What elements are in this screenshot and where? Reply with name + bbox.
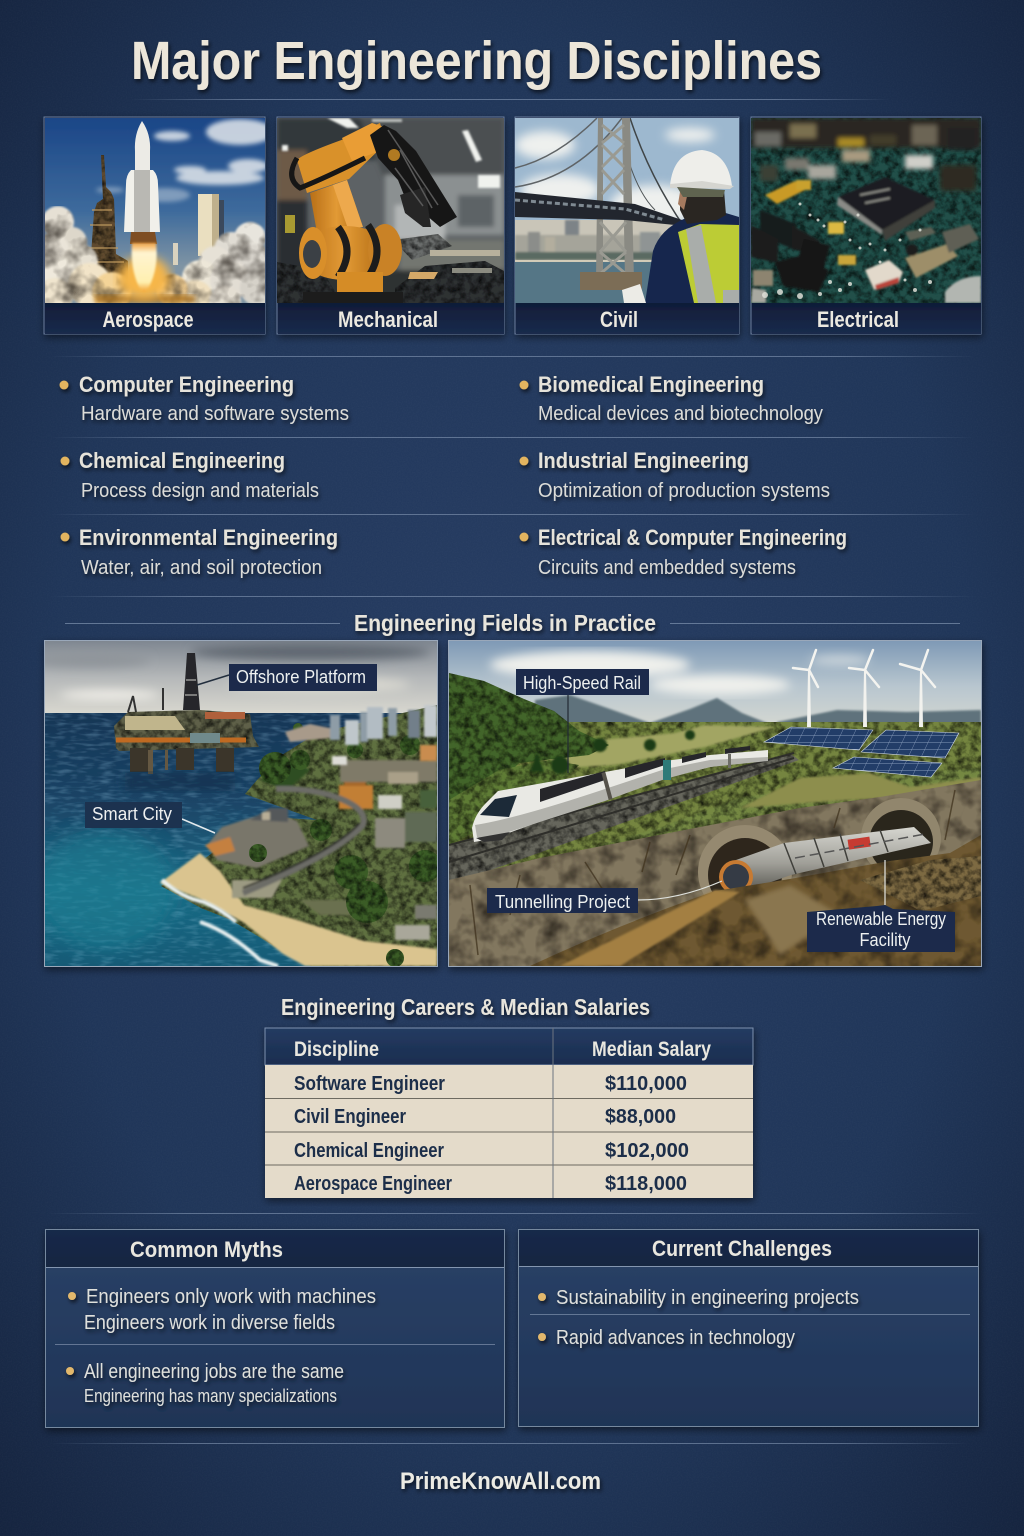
- shore buildings and greenery: [205, 760, 437, 940]
- skyline: [285, 705, 437, 765]
- beach: [160, 853, 437, 966]
- label: Tunnelling Project: Tunnelling Project: [495, 892, 630, 912]
- label: Offshore Platform: Offshore Platform: [236, 667, 366, 687]
- item: Computer Engineering: Hardware and software systems: [81, 402, 349, 425]
- caption: [278, 303, 504, 334]
- panel: offshore and smart city: [30, 640, 441, 967]
- item: Computer Engineering: [60, 372, 349, 425]
- card: Civil: [515, 117, 739, 334]
- heading: careers and salaries: Engineering Careers & Median Salaries: [281, 994, 650, 1020]
- image: robot arm in factory: [277, 118, 504, 303]
- engineer: [645, 211, 739, 303]
- item: Industrial Engineering: Optimization of production systems: [538, 479, 830, 502]
- myth two: [66, 1361, 344, 1406]
- item: Electrical & Computer Engineering: Electrical & Computer Engineering: [538, 525, 847, 550]
- caption: Civil: [600, 307, 638, 332]
- table header: Median Salary: [592, 1038, 711, 1061]
- challenge two: Rapid advances in technology: [556, 1327, 795, 1349]
- myth two: Engineering has many specializations: [84, 1386, 337, 1406]
- item: Environmental Engineering: Environmental Engineering: [79, 525, 338, 550]
- item: Computer Engineering: Computer Engineering: [79, 372, 294, 397]
- wind turbines: [793, 650, 935, 727]
- leader: smart city: [182, 819, 215, 833]
- table header: [265, 1028, 753, 1065]
- panel header: Common Myths: [130, 1237, 283, 1262]
- table body: $118,000: [605, 1173, 687, 1195]
- label: Renewable Energy Facility: Renewable Energy: [816, 909, 946, 929]
- wooded hills: [449, 673, 609, 800]
- caption: Electrical: [817, 307, 899, 332]
- label: Renewable Energy Facility: Facility: [860, 930, 910, 950]
- item: Chemical Engineering: Chemical Engineering: [79, 448, 285, 473]
- land: [161, 705, 437, 966]
- sea: [45, 713, 437, 966]
- panel: Current Challenges: [518, 1230, 978, 1426]
- leader: tunnelling: [638, 881, 722, 900]
- panel header: [46, 1230, 504, 1268]
- table body: Civil Engineer: [294, 1106, 406, 1128]
- caption: Aerospace: [102, 307, 194, 332]
- item: Environmental Engineering: [60, 525, 338, 579]
- leader: offshore: [197, 675, 229, 685]
- card: Electrical: [751, 117, 981, 334]
- rocket: [135, 121, 150, 171]
- table body: $88,000: [605, 1106, 676, 1128]
- offshore platform: [114, 653, 259, 791]
- mountains: [534, 695, 981, 722]
- label: Smart City: Smart City: [92, 804, 172, 824]
- table: median salaries: [265, 1028, 753, 1198]
- excavation wall: [449, 780, 981, 966]
- myth one: [68, 1286, 376, 1334]
- card: Mechanical: [277, 117, 504, 334]
- heading: Engineering Fields in Practice: Engineering Fields in Practice: [354, 610, 656, 636]
- item: Chemical Engineering: [60, 448, 319, 502]
- slope: [596, 770, 954, 846]
- leader: renewable: [884, 860, 886, 905]
- table body: Chemical Engineer: [294, 1140, 444, 1162]
- sky: [45, 641, 437, 714]
- panel: Common Myths: [46, 1230, 504, 1428]
- caption: [45, 303, 265, 334]
- list: engineering disciplines: [60, 372, 847, 579]
- tunnel boring machine: [719, 827, 931, 894]
- item: Environmental Engineering: Water, air, and soil protection: [81, 556, 322, 579]
- caption: [516, 303, 739, 334]
- tunnel portals: [698, 798, 941, 894]
- item: Chemical Engineering: Process design and materials: [81, 479, 319, 502]
- image: bridge and engineer: [515, 118, 739, 303]
- foreground ground: [530, 835, 981, 966]
- panel: rail tunnel and renewables: [448, 640, 982, 966]
- label: Renewable Energy Facility: [807, 905, 955, 952]
- item: Industrial Engineering: [520, 448, 830, 502]
- buildings: [88, 155, 224, 276]
- panel header: Current Challenges: [652, 1236, 832, 1261]
- item: Electrical & Computer Engineering: [520, 525, 847, 579]
- image: circuit board: [751, 118, 981, 303]
- smoke: [45, 206, 265, 303]
- table body: $102,000: [605, 1140, 689, 1162]
- train: [472, 746, 768, 842]
- caption: [752, 303, 981, 334]
- challenge one: Sustainability in engineering projects: [556, 1287, 859, 1309]
- item: Biomedical Engineering: [520, 372, 824, 425]
- panel header: [519, 1230, 978, 1267]
- solar arrays: [764, 727, 959, 777]
- table body: [265, 1028, 753, 1198]
- image: rocket launch: [45, 118, 265, 303]
- caption: Mechanical: [338, 307, 438, 332]
- item: Electrical & Computer Engineering: Circuits and embedded systems: [538, 556, 796, 579]
- sky: [449, 641, 981, 731]
- item: Biomedical Engineering: Medical devices and biotechnology: [538, 402, 824, 425]
- item: Industrial Engineering: Industrial Engineering: [538, 448, 749, 473]
- footer: PrimeKnowAll.com: [400, 1468, 601, 1495]
- table header: Discipline: [294, 1038, 379, 1061]
- fields: [449, 722, 981, 870]
- card: Aerospace: [35, 117, 276, 334]
- title: Major Engineering Disciplines: [131, 31, 822, 91]
- label: Smart City: [85, 802, 182, 828]
- item: Biomedical Engineering: Biomedical Engineering: [538, 372, 764, 397]
- robot: [310, 180, 363, 233]
- leader: high-speed rail: [567, 695, 569, 773]
- myth two: All engineering jobs are the same: [84, 1361, 344, 1383]
- myth one: Engineers only work with machines: [86, 1286, 376, 1308]
- table body: Software Engineer: [294, 1073, 445, 1095]
- label: High-Speed Rail: High-Speed Rail: [523, 673, 641, 693]
- trackbed: [449, 754, 799, 885]
- myth one: Engineers work in diverse fields: [84, 1312, 335, 1334]
- table body: $110,000: [605, 1073, 687, 1095]
- table body: Aerospace Engineer: [294, 1173, 452, 1195]
